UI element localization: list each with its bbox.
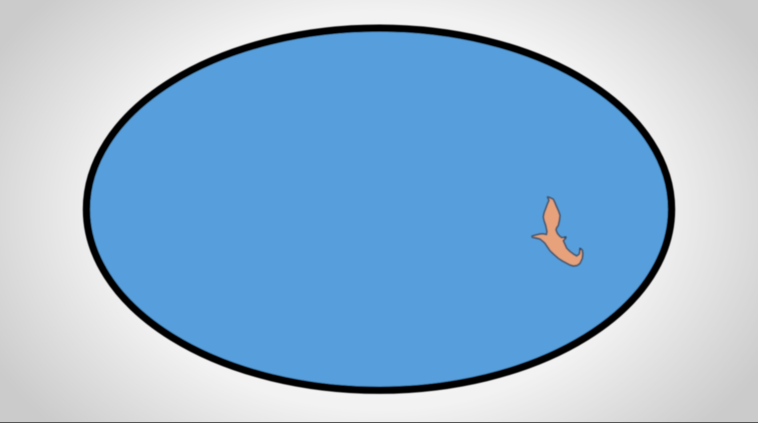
ocean ellipse: [86, 28, 672, 390]
islands: [564, 236, 581, 250]
landmass: [532, 197, 583, 266]
